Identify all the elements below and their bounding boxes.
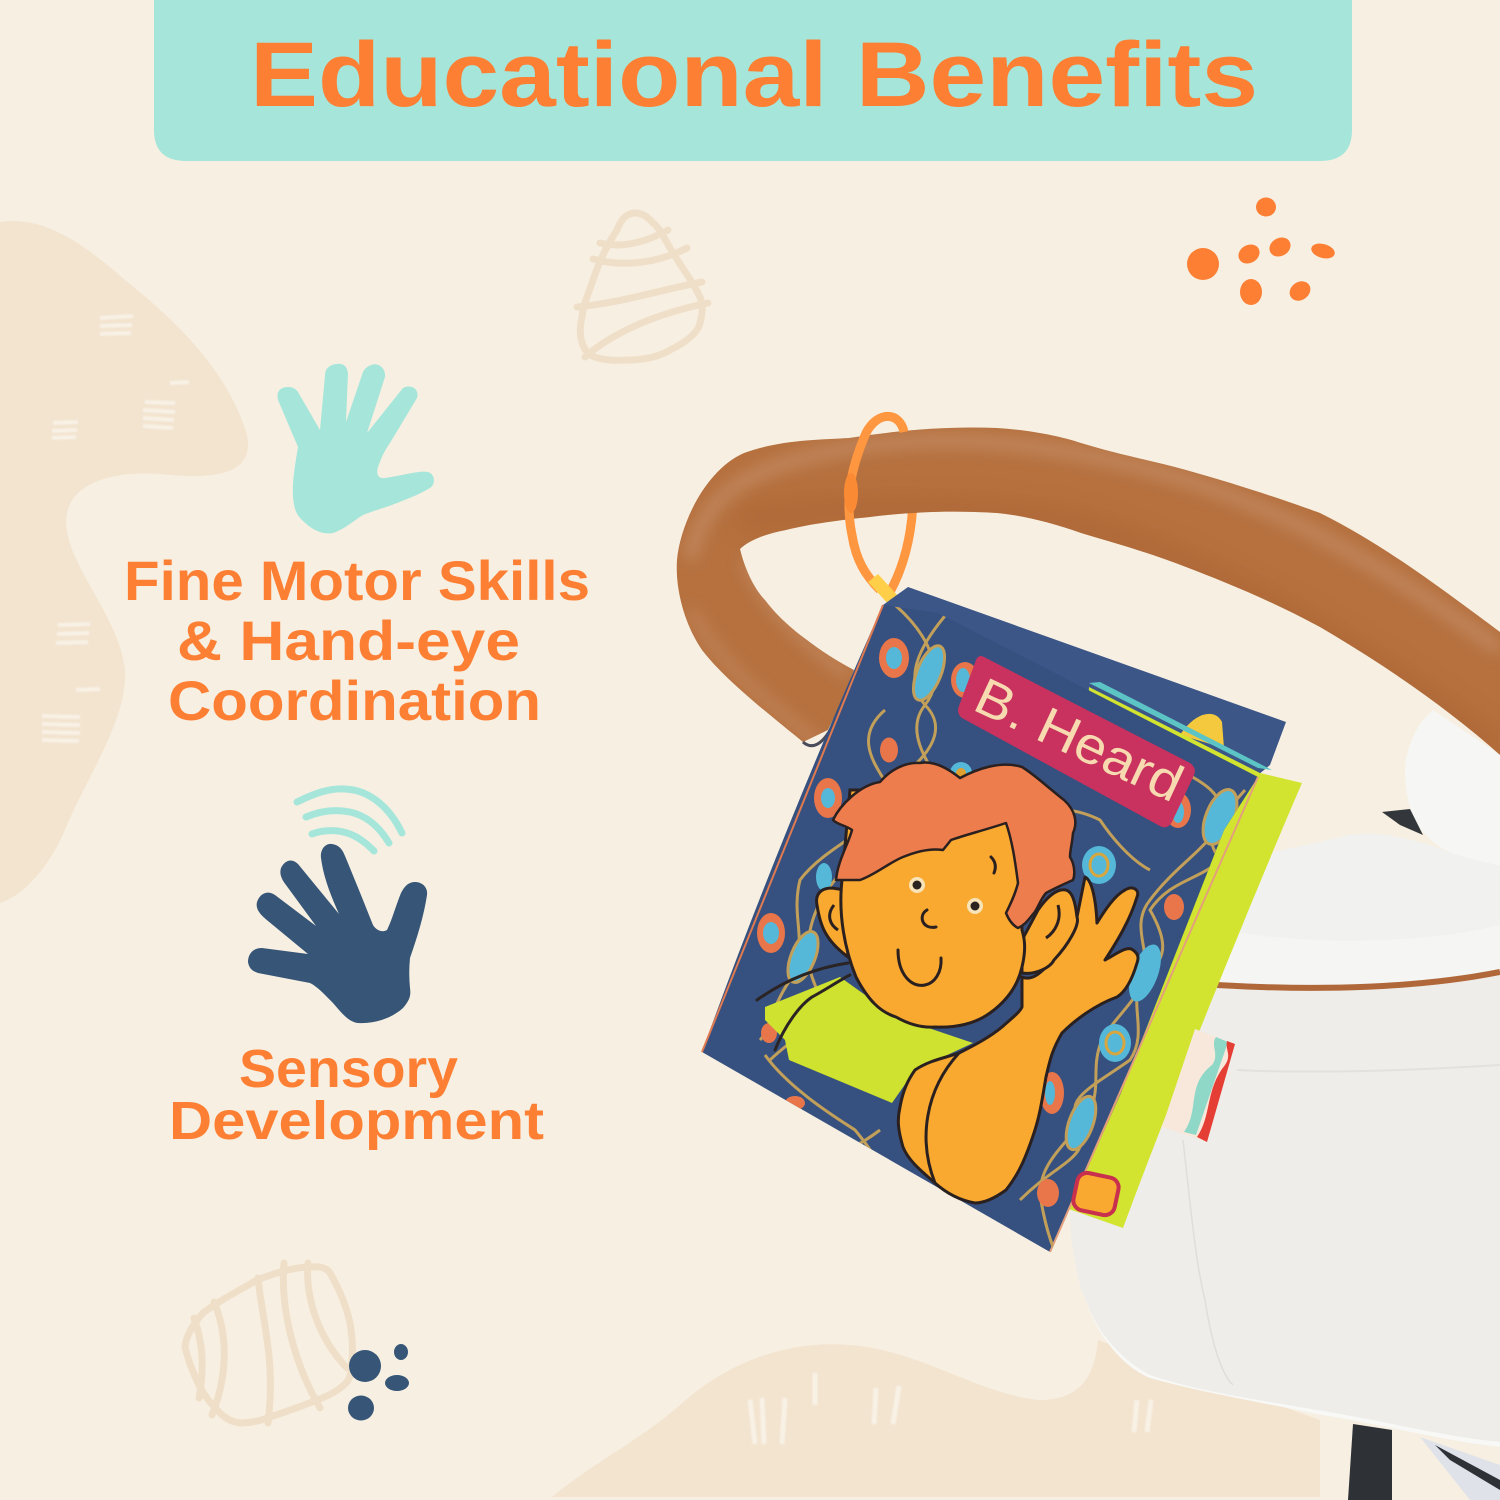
book back panel xyxy=(883,587,1286,790)
character shirt xyxy=(765,977,973,1103)
character hair xyxy=(833,762,1075,928)
photo: tan leather handle xyxy=(677,427,1500,755)
book green page xyxy=(1066,687,1302,1228)
icon: orange dots xyxy=(1187,198,1336,305)
character ears xyxy=(817,888,1077,973)
icon: striped egg doodle xyxy=(577,213,708,360)
icon: navy dots xyxy=(348,1344,409,1420)
orange tab xyxy=(1072,1171,1120,1217)
icon: striped shell doodle xyxy=(185,1263,352,1423)
icon: navy hand xyxy=(248,844,427,1023)
icon: mint hand xyxy=(277,364,434,533)
book cover xyxy=(702,605,1258,1252)
text: sensory development xyxy=(169,1039,544,1151)
character face xyxy=(898,857,995,985)
title banner xyxy=(154,0,1352,161)
text: fine motor skills: Coordination xyxy=(168,669,541,732)
book yellow flap xyxy=(1180,714,1224,748)
cover pattern xyxy=(757,605,1245,1252)
text: fine motor skills: Fine Motor Skills xyxy=(124,549,590,612)
title: Educational Benefits xyxy=(250,24,1258,126)
text: fine motor skills xyxy=(124,549,590,732)
character arm and hand xyxy=(898,877,1138,1203)
fabric tag xyxy=(1162,1029,1235,1142)
character head xyxy=(841,790,1025,1027)
text: sensory development: Development xyxy=(169,1091,544,1151)
text: fine motor skills: & Hand-eye xyxy=(177,609,520,672)
photo: white pillow xyxy=(1405,710,1500,866)
book label: B. Heard xyxy=(966,667,1192,814)
character shoulder lines xyxy=(757,963,850,1050)
photo: black clip xyxy=(1382,809,1423,835)
icon: sound waves xyxy=(297,789,402,851)
photo: orange ring front xyxy=(844,416,904,606)
photo: soft book xyxy=(702,587,1302,1252)
text: sensory development: Sensory xyxy=(239,1039,458,1099)
photo: ring back xyxy=(890,432,913,592)
photo: white stroller basket xyxy=(1070,834,1500,1500)
